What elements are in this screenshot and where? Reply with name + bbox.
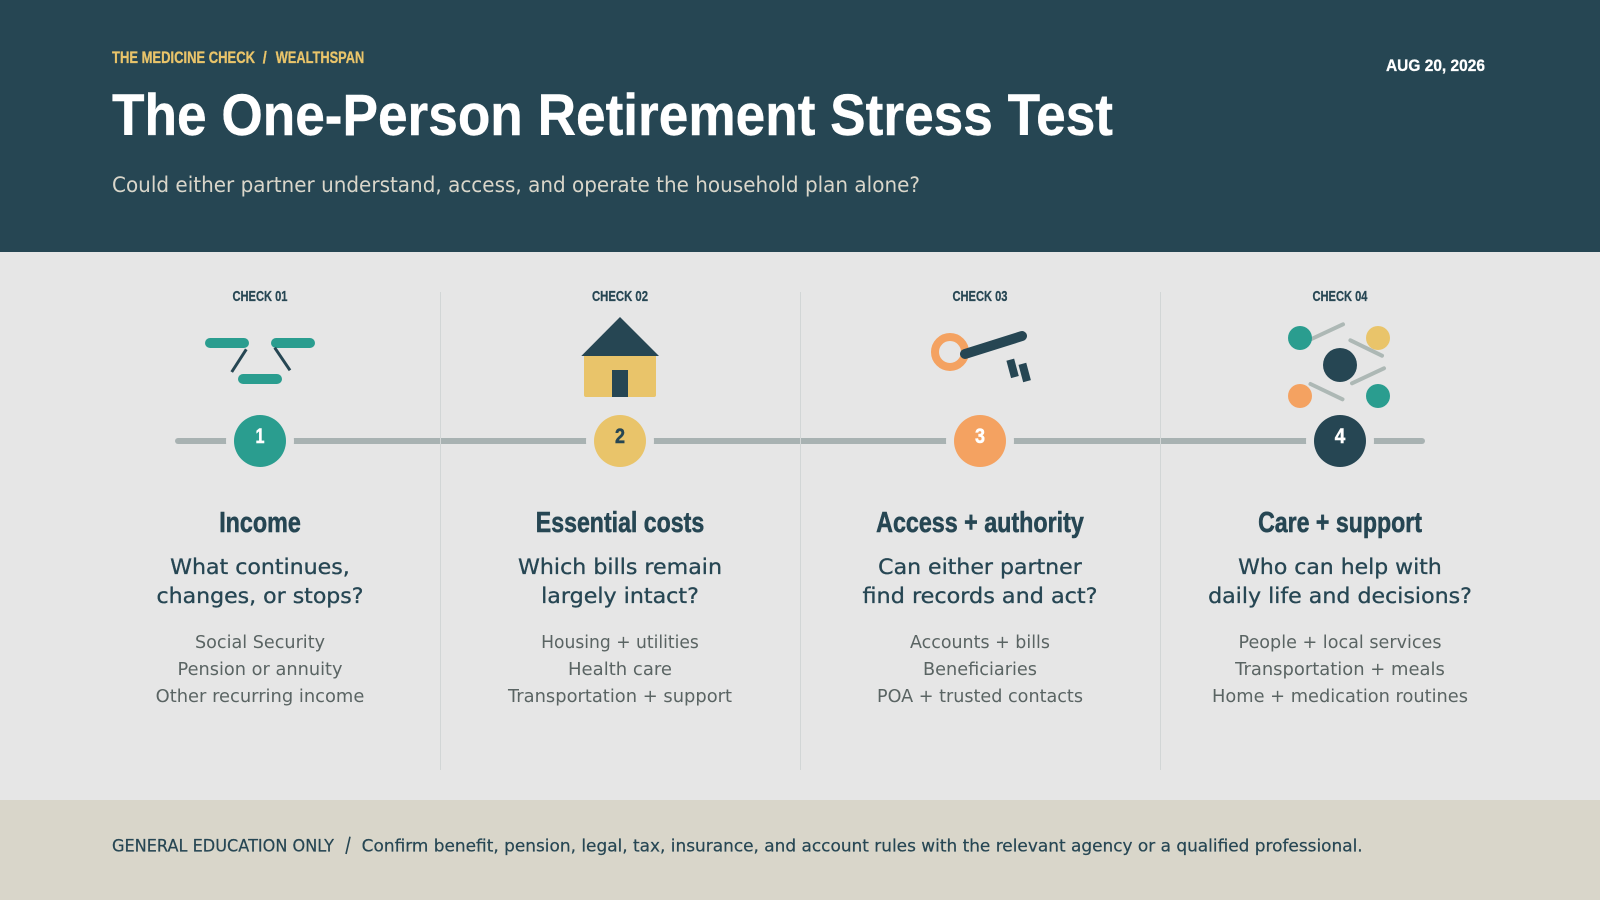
- details: access and authority: Beneficiaries: [923, 660, 1037, 680]
- question: access and authority: [862, 555, 1098, 608]
- panel: care and support: [1208, 289, 1472, 707]
- step marker 1: [226, 407, 294, 475]
- details: income: [156, 633, 364, 707]
- details: essential costs: Health care: [568, 660, 672, 680]
- panel: income: [156, 289, 364, 707]
- icon: key: [935, 336, 1031, 382]
- heading: income: Income: [219, 507, 301, 539]
- footer background: [0, 800, 1600, 900]
- question: care and support: [1208, 555, 1472, 608]
- question: essential costs: largely intact?: [541, 584, 699, 608]
- question: income: What continues,: [170, 555, 350, 579]
- check label 02: CHECK 02: [592, 289, 648, 305]
- details: access and authority: POA + trusted contacts: [877, 687, 1083, 707]
- timeline rail: [175, 438, 1425, 444]
- step marker 3: [946, 407, 1014, 475]
- date: AUG 20, 2026: [1386, 56, 1485, 75]
- question: access and authority: Can either partner: [878, 555, 1082, 579]
- footer disclaimer: Confirm benefit, pension, legal, tax, insurance, and account rules with the relevant agency or a qualified professional.: [362, 836, 1363, 855]
- details: essential costs: Transportation + support: [507, 687, 732, 707]
- footer band: [0, 800, 1600, 900]
- question: essential costs: [518, 555, 722, 608]
- details: access and authority: [877, 633, 1083, 707]
- details: access and authority: Accounts + bills: [910, 633, 1050, 653]
- eyebrow: /: [263, 49, 267, 67]
- heading: access and authority: Access + authority: [876, 507, 1084, 539]
- panel: access and authority: [862, 289, 1098, 707]
- question: essential costs: Which bills remain: [518, 555, 722, 579]
- question: care and support: Who can help with: [1238, 555, 1442, 579]
- check label 03: CHECK 03: [952, 289, 1008, 305]
- heading: care and support: Care + support: [1258, 507, 1422, 539]
- question: income: changes, or stops?: [156, 584, 364, 608]
- details: essential costs: [507, 633, 732, 707]
- details: income: Other recurring income: [156, 687, 364, 707]
- footer label: GENERAL EDUCATION ONLY: [112, 836, 335, 855]
- details: essential costs: Housing + utilities: [541, 633, 699, 653]
- icon: income streams: [205, 338, 315, 384]
- details: care and support: Home + medication routines: [1212, 687, 1468, 707]
- subtitle: Could either partner understand, access, and operate the household plan alone?: [112, 173, 920, 197]
- icon: house: [581, 317, 659, 397]
- details: care and support: Transportation + meals: [1234, 660, 1445, 680]
- check label 01: CHECK 01: [232, 289, 288, 305]
- heading: essential costs: Essential costs: [536, 507, 704, 539]
- question: care and support: daily life and decisions?: [1208, 584, 1472, 608]
- footer slash: [346, 837, 350, 854]
- timeline: [175, 407, 1425, 475]
- icon: support network: [1288, 324, 1390, 408]
- details: care and support: People + local services: [1238, 633, 1442, 653]
- step marker 4: [1306, 407, 1374, 475]
- eyebrow: THE MEDICINE CHECK: [112, 49, 255, 67]
- check label 04: CHECK 04: [1312, 289, 1368, 305]
- step marker 4: 4: [1335, 425, 1346, 448]
- title: The One-Person Retirement Stress Test: [112, 83, 1113, 148]
- details: income: Social Security: [195, 633, 325, 653]
- header background: [0, 0, 1600, 252]
- step marker 1: 1: [256, 425, 265, 448]
- question: income: [156, 555, 364, 608]
- step marker 2: 2: [615, 425, 625, 448]
- question: access and authority: find records and act?: [862, 584, 1098, 608]
- panel: essential costs: [507, 289, 732, 707]
- details: care and support: [1212, 633, 1468, 707]
- step marker 2: [586, 407, 654, 475]
- details: income: Pension or annuity: [178, 660, 342, 680]
- header band: [0, 0, 1600, 252]
- eyebrow: WEALTHSPAN: [276, 49, 364, 67]
- step marker 3: 3: [975, 425, 985, 448]
